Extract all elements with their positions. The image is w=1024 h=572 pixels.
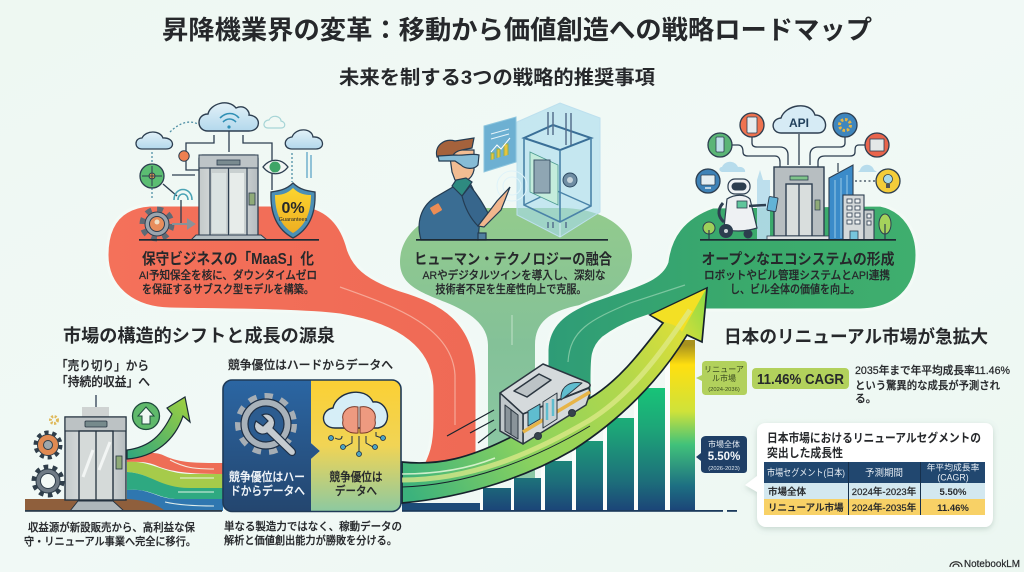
text: data caption <box>224 519 402 547</box>
ground <box>25 499 170 511</box>
flow: lime stream <box>127 462 223 488</box>
arrow: green rising <box>127 397 190 459</box>
icon: API cloud <box>773 106 826 133</box>
table heading <box>767 430 981 460</box>
icon: shield 0% guarantee: 0% <box>281 200 305 217</box>
text block: MaaS: を保証するサブスク型モデルを構築。 <box>142 282 314 296</box>
text: data side: 競争優位は <box>330 469 382 484</box>
table <box>764 462 985 515</box>
flow highlights <box>340 285 685 425</box>
text block: human technology: ARやデジタルツインを導入し、深刻な <box>422 268 606 282</box>
table: 2024年-2035年 <box>852 502 917 514</box>
callout: renewal market label <box>696 361 747 395</box>
callout: overall market label: 市場全体 <box>708 439 740 449</box>
icon: phone circle <box>740 113 764 137</box>
panel: hardware to data <box>223 380 401 512</box>
table: 市場全体 <box>768 486 807 498</box>
icon: shield 0% guarantee <box>271 183 315 238</box>
icon: tablet circle <box>708 133 732 157</box>
text block: open ecosystem: ロボットやビル管理システムとAPI連携 <box>704 268 890 282</box>
text: growth forecast: という驚異的な成長が予測され <box>855 378 1000 392</box>
icon: wifi sensor <box>174 190 192 200</box>
callout: renewal market label: (2024-2036) <box>708 387 740 393</box>
ground line <box>700 239 896 241</box>
text block: open ecosystem: し、ビル全体の価値を向上。 <box>730 282 860 296</box>
flow: green stream <box>127 472 223 499</box>
icon: orange node <box>179 151 189 161</box>
panel: open ecosystem illustration <box>696 106 900 241</box>
flow: blue stream <box>127 490 223 511</box>
panel left: blue <box>223 380 320 511</box>
text: growth forecast <box>855 363 1010 405</box>
icon: buildings <box>829 163 874 240</box>
callout: overall market label <box>696 436 747 473</box>
panel: human technology illustration <box>416 103 608 241</box>
icon: speed lines <box>447 410 496 443</box>
text: data caption: 単なる製造力ではなく、稼動データの <box>224 519 402 533</box>
icon: top cloud with wifi <box>199 103 258 131</box>
text block: MaaS: 保守ビジネスの「MaaS」化 <box>142 249 314 268</box>
flow: centre green band <box>400 208 632 480</box>
icon: pale towers and clouds <box>719 162 877 240</box>
table: 年平均成長率 <box>927 462 980 472</box>
text: sales to recurring revenue: 「持続的収益」へ <box>56 374 150 389</box>
text: sales to recurring revenue: 「売り切り」から <box>56 358 149 373</box>
icon: orange gear <box>36 433 60 457</box>
text: data caption: 解析と価値創出能力が勝敗を分ける。 <box>224 533 397 547</box>
ground line <box>416 239 608 241</box>
callout: renewal market label: リニューア <box>704 365 744 374</box>
flow: red band <box>107 205 477 470</box>
icon: trees <box>703 214 891 240</box>
arrow: growth curve <box>402 288 707 503</box>
callout: overall market label: 5.50% <box>708 451 740 463</box>
flow: right green band <box>547 205 917 440</box>
table heading: 日本市場におけるリニューアルセグメントの <box>767 430 981 445</box>
text block: MaaS: AI予知保全を核に、ダウンタイムゼロ <box>139 268 317 282</box>
table: 11.46% <box>937 503 969 514</box>
title: 昇降機業界の変革：移動から価値創造への戦略ロードマップ <box>162 15 872 45</box>
icon: left cloud <box>136 132 172 149</box>
text: sales to recurring revenue <box>56 358 150 389</box>
table: リニューアル市場 <box>768 502 844 514</box>
icon: small gear <box>50 416 58 424</box>
icon: shield 0% guarantee: Guarantees <box>279 217 308 223</box>
icon: elevator <box>65 407 126 511</box>
text: data side <box>330 469 382 498</box>
icon: display circle <box>865 133 889 157</box>
icon: right cloud <box>285 130 322 149</box>
text block: human technology: ヒューマン・テクノロジーの融合 <box>414 251 612 268</box>
heading: hardware to data: 競争優位はハードからデータへ <box>228 357 393 372</box>
icon: eye <box>263 160 288 174</box>
logo: NotebookLM: NotebookLM <box>964 558 1020 570</box>
icon: gear and wrench <box>239 397 295 455</box>
text: hardware side: ドからデータへ <box>230 483 305 498</box>
heading: structural shift: 市場の構造的シフトと成長の源泉 <box>63 325 335 346</box>
icon: green sensor <box>140 164 164 188</box>
stat: 11.46% CAGR: 11.46% CAGR <box>757 372 844 388</box>
callout: renewal market label: ル市場 <box>712 373 736 383</box>
icon: train <box>500 364 590 444</box>
text: revenue caption: 収益源が新設販売から、高利益な保 <box>28 520 195 534</box>
icon: technician <box>419 138 510 240</box>
icon: elevator <box>767 167 831 240</box>
icon: chart panel <box>484 117 516 172</box>
callout: overall market label: (2026-2023) <box>708 466 740 472</box>
text: revenue caption <box>24 520 196 548</box>
text block: open ecosystem <box>702 250 894 296</box>
text: hardware side: 競争優位はハー <box>229 469 305 484</box>
table: 2024年-2023年 <box>852 486 917 498</box>
text block: human technology: 技術者不足を生産性向上で克服。 <box>436 282 586 296</box>
icon: bulb circle <box>876 169 900 193</box>
icon: gear <box>142 209 172 239</box>
icon: monitor circle <box>696 169 720 193</box>
text block: MaaS <box>139 249 317 296</box>
table: 市場セグメント(日本) <box>767 467 845 479</box>
text: growth forecast: 2035年まで年平均成長率11.46% <box>855 363 1010 377</box>
ground line <box>139 239 319 241</box>
text: revenue caption: 守・リニューアル事業へ完全に移行。 <box>24 534 196 548</box>
panel: MaaS illustration <box>136 103 322 241</box>
flow: red stream <box>127 453 223 474</box>
table: (CAGR) <box>937 472 969 482</box>
icon: robot <box>719 179 778 238</box>
text: growth forecast: る。 <box>855 392 877 405</box>
icon: gear circle <box>833 113 857 137</box>
icon: cloud brain <box>323 392 387 456</box>
table: 予測期間 <box>865 467 903 479</box>
text: hardware side <box>229 469 305 498</box>
panel right: yellow <box>311 380 401 511</box>
bar chart: market growth <box>402 340 737 512</box>
flow highlights <box>165 460 214 506</box>
icon: API cloud: API <box>789 116 809 130</box>
subtitle: recommendations: 未来を制する3つの戦略的推奨事項 <box>339 66 656 89</box>
icon: hologram box <box>517 103 600 237</box>
panel: revenue flows <box>25 395 223 512</box>
icon: up arrow circle <box>132 402 160 430</box>
icon: gray arrow <box>172 220 194 228</box>
text block: human technology <box>414 251 612 296</box>
table: 5.50% <box>940 487 967 498</box>
table heading: 突出した成長性 <box>767 445 843 460</box>
icon: pale cloud <box>264 116 285 128</box>
text block: open ecosystem: オープンなエコシステムの形成 <box>702 250 894 268</box>
panel outline <box>223 380 401 512</box>
icon: connector lines <box>732 134 875 181</box>
icon: holo rings <box>497 171 527 201</box>
icon: elevator <box>191 155 267 240</box>
icon: gray gear <box>34 467 62 495</box>
icon: down arrow <box>93 395 99 417</box>
icon: connector lines <box>152 122 311 224</box>
heading: japan renewal market: 日本のリニューアル市場が急拡大 <box>724 326 988 347</box>
text: data side: データへ <box>335 483 377 498</box>
panel: data table card <box>745 423 993 527</box>
